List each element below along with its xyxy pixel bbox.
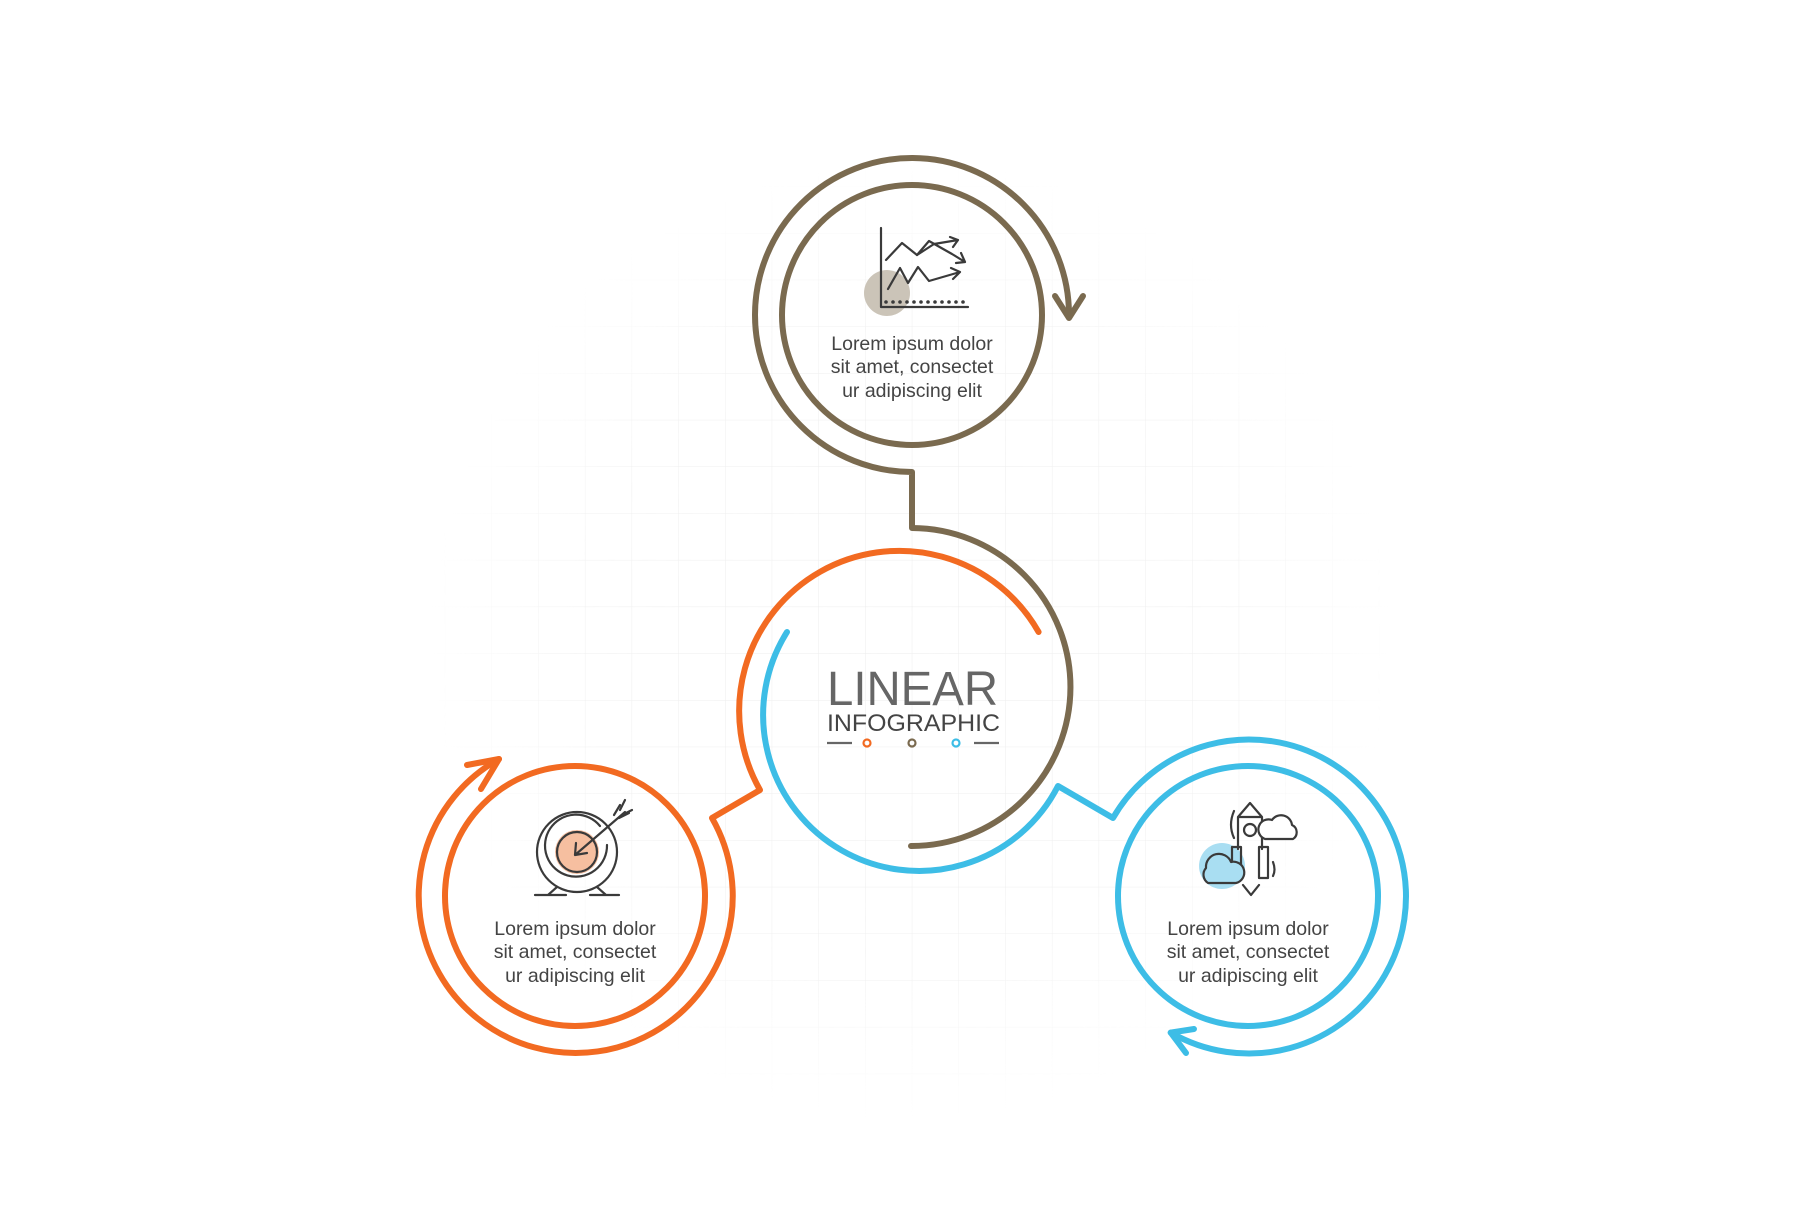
text: right <box>1167 918 1330 987</box>
icon: rocket <box>1199 803 1297 895</box>
brown loop: top circle and connector <box>755 158 1083 846</box>
text: left: sit amet, consectet <box>494 941 657 963</box>
text: right: ur adipiscing elit <box>1178 965 1318 987</box>
title <box>827 663 1000 746</box>
text: top <box>831 333 994 402</box>
text: top: sit amet, consectet <box>831 356 994 378</box>
blue loop: right circle and connector <box>763 632 1406 1053</box>
text: right: sit amet, consectet <box>1167 941 1330 963</box>
text: right: Lorem ipsum dolor <box>1167 918 1329 940</box>
icon: target <box>535 800 632 895</box>
text: left: Lorem ipsum dolor <box>494 918 656 940</box>
text: left: ur adipiscing elit <box>505 965 645 987</box>
text: left <box>494 918 657 987</box>
icon: chart <box>864 228 968 316</box>
title: LINEAR <box>827 663 998 716</box>
title: INFOGRAPHIC <box>827 710 1000 737</box>
orange loop: left circle and connector <box>419 551 1039 1053</box>
text: top: ur adipiscing elit <box>842 380 982 402</box>
text: top: Lorem ipsum dolor <box>831 333 993 355</box>
